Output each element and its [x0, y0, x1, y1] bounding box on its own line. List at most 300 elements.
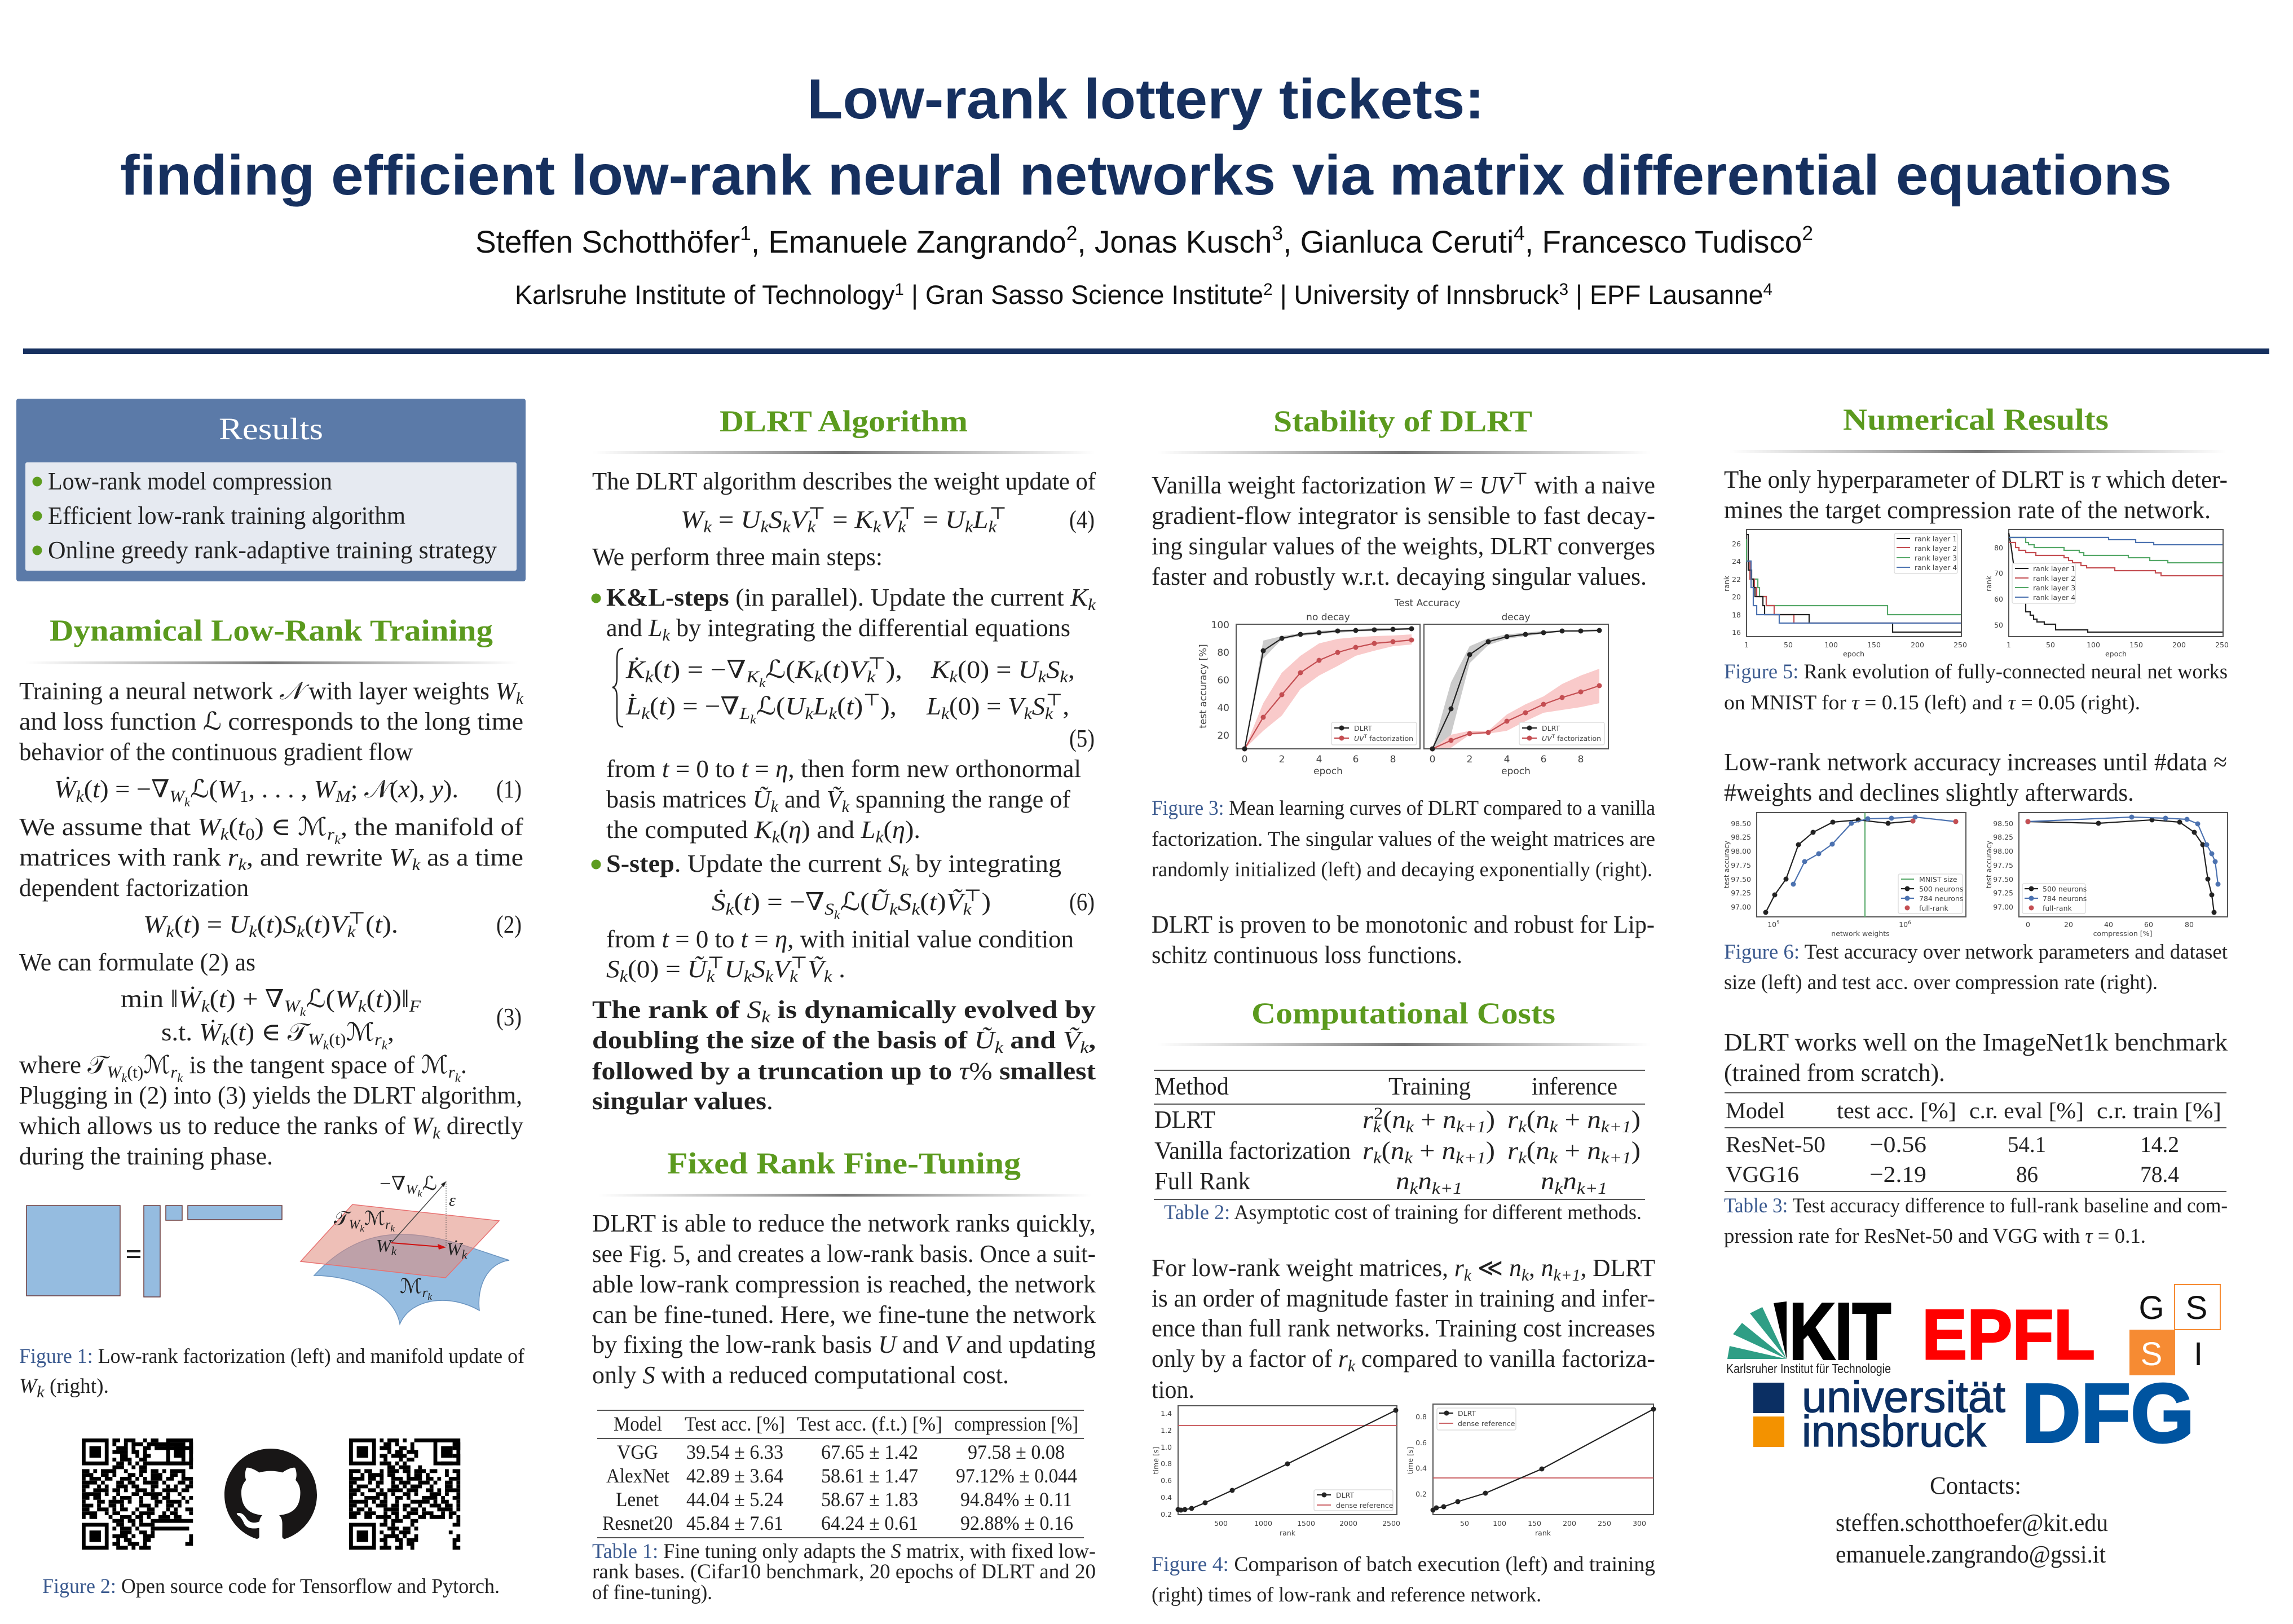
chart: training time (figure 4 right): 0.2 — [1416, 1490, 1427, 1498]
chart: accuracy over weights (figure 6 left): 500 neurons — [1919, 885, 1963, 893]
figure 5 caption — [1724, 660, 2228, 714]
table 2 caption: Table 2: Asymptotic cost of training for different methods. — [1164, 1201, 1642, 1224]
chart: accuracy over compression (figure 6 right) — [1985, 813, 2228, 938]
chart: accuracy over compression (figure 6 right): 97.75 — [1993, 861, 2013, 870]
chart: training time (figure 4 right): 0.6 — [1416, 1438, 1427, 1447]
chart: rank evolution tau 0.15 (figure 5 left): rank layer 4 — [1915, 563, 1957, 572]
body text and equations: Sk(0) = Ũk⊤UkSkVk⊤Ṽk . — [606, 954, 845, 986]
body text and equations: The DLRT algorithm describes the weight update of — [592, 467, 1096, 495]
table 1: VGG — [617, 1441, 658, 1463]
chart: rank evolution tau 0.15 (figure 5 left): rank layer 1 — [1915, 535, 1957, 543]
body text: We assume that Wk(t0) ∈ ℳ rk, the manifold of — [19, 813, 523, 847]
body text and equations: (4) — [1069, 506, 1095, 533]
table 3: 14.2 — [2140, 1132, 2179, 1157]
table 1: 42.89 ± 3.64 — [686, 1464, 783, 1487]
stability statement — [1152, 911, 1655, 969]
table 1: 97.12% ± 0.044 — [956, 1464, 1077, 1487]
figure 4 caption — [1152, 1553, 1655, 1607]
table 2 — [1154, 1070, 1645, 1199]
body text: and loss function ℒ corresponds to the long time — [19, 708, 523, 735]
table 1: 44.04 ± 5.24 — [686, 1488, 783, 1511]
body text: min ‖Ẇk(t) + ∇ Wkℒ(Wk(t))‖F — [121, 985, 421, 1019]
logo: gssi: I — [2194, 1336, 2203, 1373]
body text: The only hyperparameter of DLRT is τ which deter- — [1724, 466, 2228, 493]
body text and equations: (5) — [1069, 725, 1095, 752]
chart: rank evolution tau 0.15 (figure 5 left): 20 — [1732, 593, 1741, 601]
chart: rank evolution tau 0.05 (figure 5 right): rank layer 3 — [2033, 584, 2075, 592]
table 1: Lenet — [616, 1488, 659, 1511]
key statement: followed by a truncation up to τ% smallest — [592, 1057, 1096, 1085]
figure 3 caption: randomly initialized (left) and decaying exponentially (right). — [1152, 858, 1652, 881]
chart: rank evolution tau 0.05 (figure 5 right): 200 — [2172, 641, 2186, 649]
chart: test accuracy curves (figure 3): 6 — [1353, 754, 1359, 765]
chart: batch execution time (figure 4 left): 0.2 — [1161, 1510, 1172, 1519]
title — [120, 68, 2172, 207]
figure 3 caption: factorization. The singular values of the weight matrices are — [1152, 828, 1655, 851]
chart: batch execution time (figure 4 left): rank — [1280, 1529, 1296, 1537]
chart: test accuracy curves (figure 3): DLRT — [1354, 724, 1372, 732]
stability statement: DLRT is proven to be monotonic and robust for Lip- — [1152, 911, 1655, 938]
logo: university of innsbruck — [1753, 1372, 2005, 1456]
body text: during the training phase. — [19, 1142, 273, 1170]
key statement: The rank of Sk is dynamically evolved by — [592, 996, 1096, 1026]
logo: gssi: G — [2138, 1290, 2164, 1326]
chart: test accuracy curves (figure 3): 2 — [1467, 754, 1472, 765]
body text and equations: We perform three main steps: — [592, 543, 883, 571]
heading: Fixed Rank Fine-Tuning — [667, 1146, 1021, 1180]
body text: (3) — [496, 1003, 522, 1031]
chart: rank evolution tau 0.05 (figure 5 right): 250 — [2215, 641, 2229, 649]
chart: rank evolution tau 0.05 (figure 5 right): 80 — [1994, 544, 2003, 552]
chart: batch execution time (figure 4 left): 2000 — [1339, 1519, 1357, 1528]
panel: fixed rank fine-tuning — [592, 1146, 1096, 1604]
table 1: 97.58 ± 0.08 — [968, 1441, 1065, 1463]
chart: batch execution time (figure 4 left): DLRT — [1336, 1491, 1354, 1499]
imagenet statement — [1724, 1029, 2228, 1087]
chart: accuracy over compression (figure 6 right): 500 neurons — [2043, 885, 2087, 893]
chart: training time (figure 4 right): DLRT — [1458, 1409, 1476, 1418]
chart: training time (figure 4 right): 0.8 — [1416, 1413, 1427, 1421]
chart: rank evolution tau 0.05 (figure 5 right): 50 — [2046, 641, 2055, 649]
table 1: 58.61 ± 1.47 — [821, 1464, 918, 1487]
chart: test accuracy curves (figure 3): 40 — [1217, 703, 1229, 714]
body text and equations: from t = 0 to t = η, with initial value condition — [606, 925, 1074, 953]
body text and equations: and Lk by integrating the differential equations — [606, 614, 1070, 645]
key statement: doubling the size of the basis of Ũk and Ṽk, — [592, 1026, 1096, 1057]
table 3: Model — [1726, 1098, 1785, 1123]
contacts: steffen.schotthoefer@kit.edu — [1836, 1509, 2108, 1537]
results list — [48, 467, 497, 564]
heading: results: Results — [219, 412, 323, 446]
body text: only by a factor of rk compared to vanilla factoriza- — [1152, 1345, 1655, 1375]
chart: rank evolution tau 0.15 (figure 5 left): 250 — [1954, 641, 1967, 649]
figure 3 caption: Figure 3: Mean learning curves of DLRT compared to a vanilla — [1152, 797, 1655, 820]
chart: accuracy over compression (figure 6 right): test accuracy — [1985, 840, 1993, 888]
figure 1 right: manifold update — [301, 1173, 509, 1324]
chart: rank evolution tau 0.15 (figure 5 left): 100 — [1824, 641, 1838, 649]
chart: test accuracy curves (figure 3): 4 — [1316, 754, 1322, 765]
chart: training time (figure 4 right) — [1406, 1404, 1653, 1537]
table 1: 39.54 ± 6.33 — [686, 1441, 783, 1463]
body text and equations: S-step. Update the current Sk by integrating — [606, 850, 1061, 880]
body text: s.t. Ẇk(t) ∈ 𝒯 Wk(t)ℳrk, — [161, 1018, 394, 1052]
results list: Low-rank model compression — [48, 467, 332, 495]
chart: accuracy over weights (figure 6 left): 97.25 — [1731, 889, 1751, 897]
body text: gradient-flow integrator is sensible to fast decay- — [1152, 502, 1655, 529]
figure 2 caption: Figure 2: Open source code for Tensorflow and Pytorch. — [42, 1575, 500, 1598]
chart: rank evolution tau 0.15 (figure 5 left): rank layer 3 — [1915, 554, 1957, 562]
chart: training time (figure 4 right): 200 — [1563, 1519, 1576, 1528]
title: finding efficient low-rank neural networks via matrix differential equations — [120, 144, 2172, 207]
panel: dlrt algorithm — [591, 404, 1096, 1115]
chart: training time (figure 4 right): 50 — [1460, 1519, 1469, 1528]
body text: Ẇk(t) = −∇Wkℒ(W1, . . . , WM; 𝒩(x), y). — [54, 775, 458, 809]
chart: test accuracy curves (figure 3): 8 — [1578, 754, 1584, 765]
chart: accuracy over weights (figure 6 left): MNIST size — [1919, 875, 1957, 884]
chart: accuracy over compression (figure 6 right): 98.50 — [1993, 819, 2013, 828]
logo: kit: KIT — [1789, 1287, 1891, 1376]
figure 6 caption — [1724, 941, 2228, 994]
table 3: VGG16 — [1726, 1162, 1799, 1187]
heading: Numerical Results — [1843, 403, 2109, 436]
chart: rank evolution tau 0.15 (figure 5 left): 16 — [1732, 628, 1741, 637]
chart: batch execution time (figure 4 left): 1500 — [1297, 1519, 1315, 1528]
body text and equations: basis matrices Ũk and Ṽk spanning the range of — [606, 785, 1070, 816]
chart: rank evolution tau 0.15 (figure 5 left): 200 — [1911, 641, 1924, 649]
chart: training time (figure 4 right): 0.4 — [1416, 1464, 1427, 1472]
heading: Dynamical Low-Rank Training — [50, 614, 493, 647]
panel: computational costs — [1152, 996, 1655, 1607]
body text: (2) — [496, 911, 522, 938]
chart: test accuracy curves (figure 3): decay — [1501, 612, 1531, 623]
table 1: 92.88% ± 0.16 — [960, 1512, 1073, 1534]
chart: training time (figure 4 right): rank — [1535, 1529, 1551, 1537]
body text: Wk(t) = Uk(t)Sk(t)Vk⊤(t). — [143, 909, 398, 941]
chart: rank evolution tau 0.15 (figure 5 left): 26 — [1732, 540, 1741, 548]
figure 1 right: manifold update: ε — [449, 1191, 456, 1210]
table 2: rk(nk + nk+1) — [1507, 1137, 1641, 1167]
chart: test accuracy curves (figure 3): 4 — [1504, 754, 1510, 765]
body text and equations: from t = 0 to t = η, then form new orthonormal — [606, 755, 1081, 783]
chart: training time (figure 4 right): 150 — [1528, 1519, 1541, 1528]
table 3: −0.56 — [1869, 1132, 1926, 1157]
logo: epfl: EPFL — [1922, 1296, 2095, 1374]
chart: accuracy over compression (figure 6 right): 0 — [2026, 920, 2030, 929]
logo: university of innsbruck: innsbruck — [1802, 1406, 1987, 1456]
body text — [19, 677, 524, 1170]
chart: training time (figure 4 right): 250 — [1598, 1519, 1611, 1528]
chart: batch execution time (figure 4 left): time [s] — [1152, 1447, 1160, 1474]
chart: accuracy over weights (figure 6 left): 105 — [1767, 920, 1780, 929]
body text: matrices with rank rk, and rewrite Wk as a time — [19, 844, 523, 874]
figure 6 caption: Figure 6: Test accuracy over network parameters and dataset — [1724, 941, 2228, 964]
chart: accuracy over weights (figure 6 left): 97.75 — [1731, 861, 1751, 870]
body text and equations: K&L-steps (in parallel). Update the current Kk — [606, 584, 1096, 614]
accuracy statement: Low-rank network accuracy increases until #data ≈ — [1724, 748, 2227, 776]
table 1: Test acc. (f.t.) [%] — [797, 1413, 942, 1435]
figure 4 caption: (right) times of low-rank and reference network. — [1152, 1583, 1541, 1607]
table 1: Model — [614, 1413, 662, 1435]
results list: Efficient low-rank training algorithm — [48, 502, 405, 529]
body text: which allows us to reduce the ranks of Wk directly — [19, 1112, 523, 1142]
table 1: 58.67 ± 1.83 — [821, 1488, 918, 1511]
panel: results — [16, 399, 526, 581]
chart: accuracy over compression (figure 6 right): 40 — [2104, 920, 2113, 929]
chart: test accuracy curves (figure 3): 0 — [1430, 754, 1435, 765]
chart: test accuracy curves (figure 3): 100 — [1211, 620, 1229, 631]
figure 1 caption — [19, 1345, 525, 1401]
body text — [592, 1210, 1096, 1389]
table 2: Training — [1388, 1073, 1471, 1100]
chart: rank evolution tau 0.15 (figure 5 left): rank layer 2 — [1915, 544, 1957, 553]
chart: test accuracy curves (figure 3) — [1198, 598, 1608, 777]
chart: test accuracy curves (figure 3): UVT factorization — [1542, 734, 1601, 743]
table 2: inference — [1532, 1073, 1617, 1100]
logo: gssi — [2129, 1285, 2220, 1375]
table 2: Full Rank — [1154, 1167, 1250, 1195]
figure 1 right: manifold update: Wk — [376, 1235, 398, 1258]
body text — [1152, 1254, 1655, 1404]
chart: training time (figure 4 right): 100 — [1493, 1519, 1506, 1528]
chart: accuracy over compression (figure 6 right): 97.25 — [1993, 889, 2013, 897]
body text: Vanilla weight factorization W = UV⊤ with a naive — [1152, 470, 1655, 499]
logo: university of innsbruck: universität — [1802, 1372, 2005, 1422]
panel: dynamical low-rank training — [19, 614, 525, 1598]
logo: kit — [1726, 1287, 1891, 1376]
figure 1 right: manifold update: ℳrk — [400, 1275, 432, 1302]
body text: by fixing the low-rank basis U and V and updating — [592, 1331, 1096, 1358]
chart: accuracy over weights (figure 6 left): 784 neurons — [1919, 894, 1963, 903]
contacts: emanuele.zangrando@gssi.it — [1836, 1541, 2106, 1568]
body text: where 𝒯Wk(t)ℳrk is the tangent space of ℳ rk. — [19, 1051, 467, 1085]
chart: batch execution time (figure 4 left): 1.2 — [1161, 1426, 1172, 1435]
chart: accuracy over compression (figure 6 right): 98.00 — [1993, 847, 2013, 855]
chart: rank evolution tau 0.05 (figure 5 right): 60 — [1994, 595, 2003, 603]
heading: Computational Costs — [1251, 996, 1555, 1030]
body text: tion. — [1152, 1376, 1194, 1404]
chart: test accuracy curves (figure 3): 2 — [1279, 754, 1285, 765]
qr code: tensorflow — [82, 1440, 193, 1548]
chart: accuracy over weights (figure 6 left): 106 — [1899, 920, 1911, 929]
table 3: test acc. [%] — [1837, 1098, 1956, 1123]
chart: batch execution time (figure 4 left): 1000 — [1254, 1519, 1272, 1528]
body text and equations: (6) — [1069, 888, 1095, 916]
body text and equations: K̇k(t) = −∇ Kkℒ(Kk(t)Vk⊤), — [625, 654, 902, 690]
figure 1 right: manifold update: 𝒯Wkℳrk — [334, 1208, 395, 1234]
body text: mines the target compression rate of the network. — [1724, 496, 2211, 524]
chart: test accuracy curves (figure 3): epoch — [1313, 766, 1343, 777]
imagenet statement: DLRT works well on the ImageNet1k benchmark — [1724, 1029, 2228, 1056]
body text: able low-rank compression is reached, the network — [592, 1270, 1096, 1298]
heading: Stability of DLRT — [1273, 404, 1532, 438]
chart: training time (figure 4 right): dense reference — [1458, 1419, 1515, 1428]
chart: accuracy over weights (figure 6 left): full-rank — [1919, 904, 1949, 912]
chart: rank evolution tau 0.05 (figure 5 right): epoch — [2105, 650, 2127, 658]
figure 1 right: manifold update: Ẇk — [447, 1239, 468, 1261]
body text: is an order of magnitude faster in training and infer- — [1152, 1285, 1655, 1312]
chart: rank evolution tau 0.15 (figure 5 left): 150 — [1867, 641, 1881, 649]
chart: accuracy over weights (figure 6 left): 98.25 — [1731, 833, 1751, 841]
chart: accuracy over weights (figure 6 left): 98.00 — [1731, 847, 1751, 855]
body text and equations: Ṡk(t) = −∇ Skℒ(ŨkSk(t)Ṽk⊤) — [712, 886, 991, 922]
table 3: ResNet-50 — [1726, 1132, 1825, 1157]
table 1: AlexNet — [606, 1464, 669, 1487]
chart: accuracy over compression (figure 6 right): full-rank — [2043, 904, 2072, 912]
chart: test accuracy curves (figure 3): 80 — [1217, 647, 1229, 659]
figure 4 caption: Figure 4: Comparison of batch execution (left) and training — [1152, 1553, 1655, 1576]
chart: accuracy over compression (figure 6 right): 98.25 — [1993, 833, 2013, 841]
results list: Online greedy rank-adaptive training strategy — [48, 536, 497, 564]
chart: accuracy over compression (figure 6 right): 97.50 — [1993, 875, 2013, 884]
chart: batch execution time (figure 4 left): 1.0 — [1161, 1443, 1172, 1451]
chart: rank evolution tau 0.05 (figure 5 right): rank layer 2 — [2033, 574, 2075, 582]
table 2: DLRT — [1154, 1106, 1215, 1133]
body text and equations: Lk(0) = VkSk⊤, — [926, 691, 1069, 723]
contacts: Contacts: — [1930, 1472, 2021, 1499]
chart: rank evolution tau 0.05 (figure 5 right): 100 — [2087, 641, 2100, 649]
chart: rank evolution tau 0.15 (figure 5 left): 18 — [1732, 611, 1741, 619]
chart: test accuracy curves (figure 3): UVT factorization — [1354, 734, 1413, 743]
key statement — [592, 996, 1096, 1115]
table 2: Vanilla factorization — [1154, 1137, 1351, 1164]
chart: test accuracy curves (figure 3): no decay — [1306, 612, 1350, 623]
table 3: c.r. eval [%] — [1969, 1098, 2084, 1123]
logo: gssi: S — [2186, 1290, 2207, 1326]
chart: rank evolution tau 0.05 (figure 5 right): 1 — [2007, 641, 2011, 649]
chart: rank evolution tau 0.05 (figure 5 right): rank layer 4 — [2033, 593, 2075, 602]
chart: rank evolution tau 0.05 (figure 5 right): 70 — [1994, 569, 2003, 577]
chart: training time (figure 4 right): time [s] — [1406, 1447, 1414, 1474]
table 1: compression [%] — [954, 1413, 1078, 1435]
table 1: Resnet20 — [602, 1512, 673, 1534]
chart: batch execution time (figure 4 left): 0.8 — [1161, 1459, 1172, 1468]
body text: For low-rank weight matrices, rk ≪ nk, nk+1, DLRT — [1152, 1254, 1655, 1285]
key statement: singular values . — [592, 1087, 773, 1115]
chart: batch execution time (figure 4 left): 2500 — [1382, 1519, 1400, 1528]
logo: kit: Karlsruher Institut für Technologie — [1726, 1361, 1891, 1376]
table 3: 78.4 — [2140, 1162, 2179, 1187]
body text: Plugging in (2) into (3) yields the DLRT algorithm, — [19, 1082, 522, 1109]
table 1: 94.84% ± 0.11 — [960, 1488, 1072, 1511]
stability statement: schitz continuous loss functions. — [1152, 941, 1462, 969]
chart: batch execution time (figure 4 left) — [1152, 1406, 1400, 1537]
chart: batch execution time (figure 4 left): 500 — [1214, 1519, 1228, 1528]
body text: ing singular values of the weights, DLRT converges — [1152, 532, 1655, 560]
body text: behavior of the continuous gradient flow — [19, 738, 413, 766]
body text: only S with a reduced computational cost. — [592, 1361, 1009, 1389]
body text and equations: the computed Kk(η) and Lk(η). — [606, 816, 920, 846]
panel: stability of dlrt — [1152, 404, 1655, 969]
table 3: −2.19 — [1869, 1162, 1926, 1187]
heading: DLRT Algorithm — [720, 404, 968, 438]
chart: test accuracy curves (figure 3): 6 — [1541, 754, 1546, 765]
chart: accuracy over compression (figure 6 right): compression [%] — [2093, 929, 2152, 938]
chart: rank evolution tau 0.15 (figure 5 left): 22 — [1732, 575, 1741, 584]
chart: rank evolution tau 0.15 (figure 5 left) — [1722, 529, 1967, 658]
chart: test accuracy curves (figure 3): epoch — [1501, 766, 1531, 777]
chart: rank evolution tau 0.05 (figure 5 right): 50 — [1994, 621, 2003, 629]
table 2: rk(nk + nk+1) — [1507, 1106, 1641, 1136]
chart: rank evolution tau 0.05 (figure 5 right): 150 — [2129, 641, 2143, 649]
chart: accuracy over weights (figure 6 left) — [1722, 813, 1966, 938]
chart: test accuracy curves (figure 3): DLRT — [1542, 724, 1560, 732]
body text: dependent factorization — [19, 874, 249, 902]
table 2: nknk+1 — [1396, 1167, 1462, 1198]
table 1: Test acc. [%] — [685, 1413, 785, 1435]
chart: test accuracy curves (figure 3): 20 — [1217, 730, 1229, 742]
body text — [1152, 470, 1655, 590]
chart: test accuracy curves (figure 3): Test Accuracy — [1394, 598, 1460, 609]
body text: DLRT is able to reduce the network ranks quickly, — [592, 1210, 1096, 1237]
body text: (1) — [496, 775, 522, 803]
body text — [1724, 466, 2228, 524]
chart: rank evolution tau 0.15 (figure 5 left): 1 — [1744, 641, 1749, 649]
chart: accuracy over compression (figure 6 right): 784 neurons — [2043, 894, 2087, 903]
chart: batch execution time (figure 4 left): dense reference — [1336, 1501, 1394, 1510]
table 3 — [1725, 1093, 2226, 1191]
icon: github — [224, 1449, 317, 1539]
figure 6 caption: size (left) and test acc. over compression rate (right). — [1724, 971, 2158, 994]
table 2: nknk+1 — [1541, 1167, 1607, 1198]
chart: accuracy over weights (figure 6 left): test accuracy — [1722, 840, 1731, 888]
figure 1 caption: Wk (right). — [19, 1375, 109, 1401]
body text: can be fine-tuned. Here, we fine-tune the network — [592, 1301, 1096, 1329]
body text: Training a neural network 𝒩 with layer weights Wk — [19, 677, 524, 708]
chart: test accuracy curves (figure 3): test accuracy [%] — [1198, 644, 1209, 729]
table 1 caption: rank bases. (Cifar10 benchmark, 20 epochs of DLRT and 20 — [592, 1560, 1096, 1583]
contacts — [1836, 1472, 2108, 1568]
body text and equations: L̇k(t) = −∇ Lkℒ(UkLk(t)⊤), — [625, 691, 897, 726]
logo: gssi: S — [2141, 1336, 2162, 1373]
chart: rank evolution tau 0.15 (figure 5 left): rank — [1722, 575, 1731, 592]
table 3 caption — [1724, 1194, 2228, 1248]
body text: see Fig. 5, and creates a low-rank basis. Once a suit- — [592, 1240, 1096, 1268]
chart: test accuracy curves (figure 3): 60 — [1217, 675, 1229, 686]
chart: accuracy over compression (figure 6 right): 60 — [2144, 920, 2153, 929]
table 1: 45.84 ± 7.61 — [686, 1512, 783, 1534]
figure 1 left: low-rank factorization — [27, 1206, 282, 1297]
body text: faster and robustly w.r.t. decaying singular values. — [1152, 563, 1647, 590]
body text and equations: Wk = UkSkVk⊤ = KkVk⊤ = UkLk⊤ — [681, 504, 1007, 536]
body text: We can formulate (2) as — [19, 948, 255, 976]
authors: Steffen Schotthöfer1, Emanuele Zangrando2, Jonas Kusch3, Gianluca Ceruti4, Francesco Tudisco2 — [475, 222, 1813, 259]
table 1 caption — [592, 1540, 1096, 1604]
chart: accuracy over weights (figure 6 left): 97.00 — [1731, 903, 1751, 911]
figure 1 right: manifold update: −∇Wkℒ — [380, 1173, 437, 1199]
chart: rank evolution tau 0.15 (figure 5 left): epoch — [1843, 650, 1864, 658]
chart: training time (figure 4 right): 300 — [1633, 1519, 1646, 1528]
panel: numerical results — [1722, 403, 2229, 1568]
figure 1 caption: Figure 1: Low-rank factorization (left) and manifold update of — [19, 1345, 525, 1368]
table 1 caption: Table 1: Fine tuning only adapts the S matrix, with fixed low- — [592, 1540, 1096, 1563]
table 1 — [597, 1410, 1084, 1538]
table 2: Method — [1154, 1073, 1229, 1100]
table 3 caption: Table 3: Test accuracy difference to full-rank baseline and com- — [1724, 1194, 2228, 1217]
chart: rank evolution tau 0.05 (figure 5 right) — [1985, 529, 2229, 658]
table 2: rk(nk + nk+1) — [1362, 1137, 1495, 1167]
chart: rank evolution tau 0.15 (figure 5 left): 50 — [1784, 641, 1793, 649]
table 3: 86 — [2016, 1162, 2038, 1187]
chart: accuracy over compression (figure 6 right): 80 — [2185, 920, 2194, 929]
chart: test accuracy curves (figure 3): 8 — [1390, 754, 1396, 765]
imagenet statement: (trained from scratch). — [1724, 1059, 1945, 1087]
chart: accuracy over weights (figure 6 left): network weights — [1831, 929, 1890, 938]
chart: rank evolution tau 0.15 (figure 5 left): 24 — [1732, 557, 1741, 566]
title: Low-rank lottery tickets: — [807, 68, 1484, 131]
body text and equations: Kk(0) = UkSk, — [931, 656, 1075, 686]
chart: accuracy over compression (figure 6 right): 97.00 — [1993, 903, 2013, 911]
body text and equations — [591, 467, 1096, 986]
